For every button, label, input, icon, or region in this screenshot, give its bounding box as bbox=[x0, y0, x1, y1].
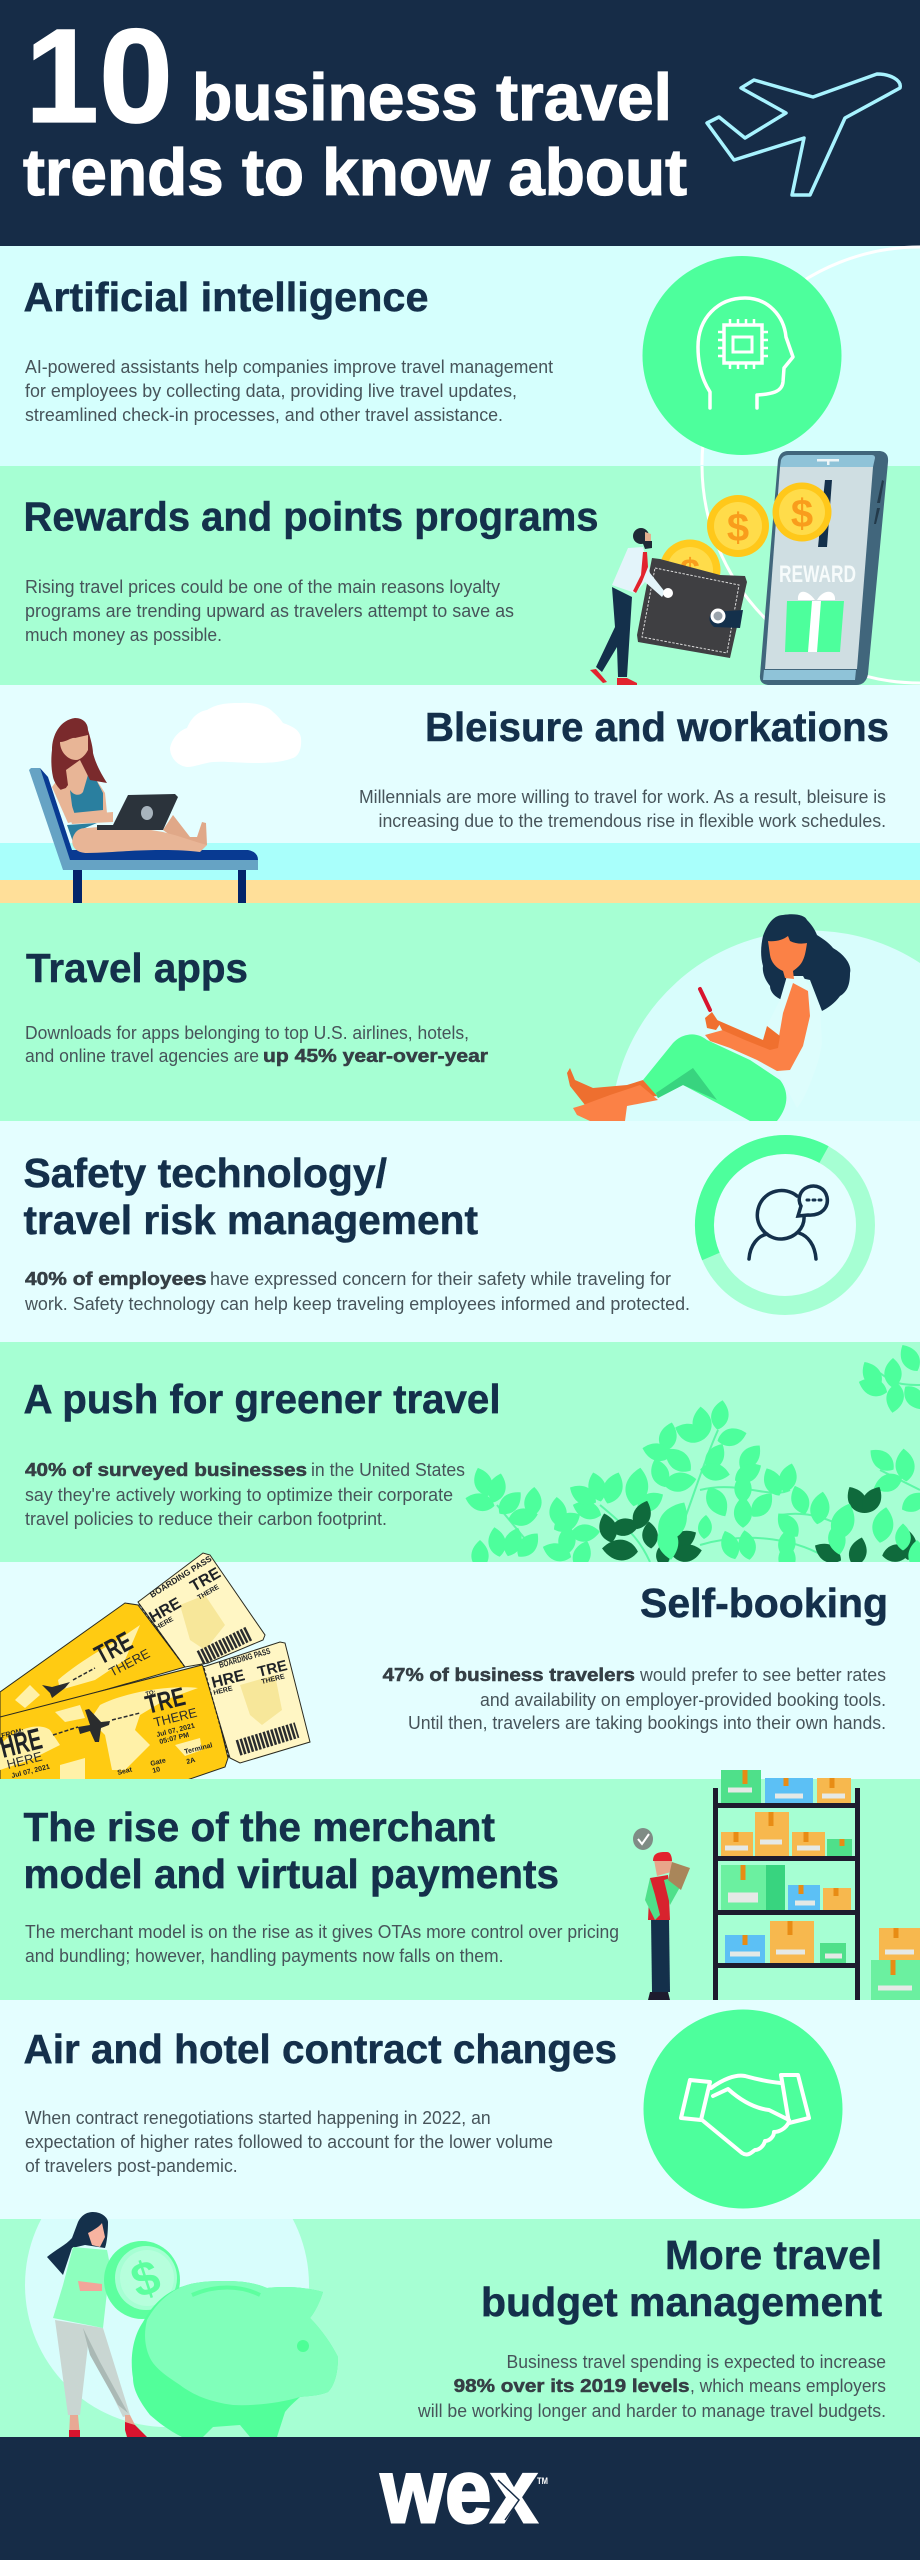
heading: Air and hotel contract changes bbox=[24, 2026, 617, 2072]
text block: will be working longer and harder to manage travel budgets. bbox=[417, 2401, 886, 2421]
panel: travel budget management bbox=[0, 2212, 920, 2437]
panel: footer bbox=[0, 2437, 920, 2560]
text block: would prefer to see better rates bbox=[639, 1665, 886, 1685]
front ticket: Seat bbox=[117, 1766, 133, 1777]
text block: When contract renegotiations started happening in 2022, an bbox=[25, 2108, 491, 2128]
front ticket: FROM: bbox=[1, 1728, 25, 1740]
front ticket: 05:07 PM bbox=[159, 1732, 190, 1746]
illustration: phone with reward: $ bbox=[791, 492, 813, 536]
decorative arc bbox=[702, 247, 920, 465]
heading: budget management bbox=[481, 2279, 882, 2325]
text block: and bundling; however, handling payments now falls on them. bbox=[25, 1946, 504, 1966]
back ticket: HRE bbox=[146, 1595, 185, 1626]
text block: 40% of employees bbox=[25, 1269, 206, 1289]
heading: More travel bbox=[665, 2232, 882, 2278]
text block: have expressed concern for their safety while traveling for bbox=[210, 1269, 671, 1289]
text block: travel policies to reduce their carbon footprint. bbox=[25, 1509, 387, 1529]
back ticket: TRE bbox=[90, 1626, 137, 1670]
heading: Rewards and points programs bbox=[24, 494, 598, 540]
panel: travel apps bbox=[0, 903, 920, 1121]
text block bbox=[417, 2352, 886, 2421]
front ticket: 2A bbox=[186, 1757, 196, 1766]
text block bbox=[359, 787, 886, 831]
heading: Bleisure and workations bbox=[425, 704, 889, 750]
back ticket: THERE bbox=[196, 1584, 221, 1602]
text block bbox=[383, 1665, 886, 1733]
heading: Travel apps bbox=[26, 945, 248, 991]
text block: 40% of surveyed businesses bbox=[25, 1460, 307, 1480]
front ticket: HRE bbox=[210, 1667, 247, 1692]
illustration: warehouse shelf bbox=[713, 1770, 920, 2000]
front ticket: Jul 07, 2021 bbox=[11, 1764, 51, 1780]
heading bbox=[24, 1150, 478, 1243]
front ticket: Terminal bbox=[184, 1742, 213, 1756]
front ticket: TRE bbox=[142, 1681, 188, 1720]
illustration: coin: $ bbox=[125, 2250, 167, 2309]
heading: travel risk management bbox=[24, 1197, 478, 1243]
front ticket: HERE bbox=[213, 1685, 234, 1697]
text block: increasing due to the tremendous rise in flexible work schedules. bbox=[378, 811, 886, 831]
heading: A push for greener travel bbox=[24, 1376, 500, 1422]
panel: artificial intelligence bbox=[0, 246, 920, 466]
text block: in the United States bbox=[311, 1460, 465, 1480]
text block: Downloads for apps belonging to top U.S. airlines, hotels, bbox=[25, 1023, 469, 1043]
text block: expectation of higher rates followed to account for the lower volume bbox=[25, 2132, 553, 2152]
title bbox=[23, 2, 687, 209]
illustration: piggy bank bbox=[132, 2281, 338, 2437]
back ticket bbox=[0, 1553, 265, 1720]
front ticket: THERE bbox=[261, 1673, 286, 1686]
text block: of travelers post-pandemic. bbox=[25, 2156, 238, 2176]
icon: AI head in circle bbox=[642, 256, 842, 455]
front ticket: TRE bbox=[256, 1657, 289, 1681]
illustration: warehouse worker bbox=[633, 1828, 690, 2000]
heading: Safety technology/ bbox=[24, 1150, 387, 1196]
logo: WEX: TM bbox=[537, 2476, 548, 2486]
front ticket: TO: bbox=[145, 1690, 156, 1698]
illustration: woman with phone bbox=[567, 914, 850, 1121]
front ticket: Jul 07, 2021 bbox=[156, 1723, 196, 1739]
panel: self-booking bbox=[0, 1553, 920, 1790]
text block bbox=[25, 2108, 553, 2176]
text block: and availability on employer-provided booking tools. bbox=[480, 1690, 886, 1710]
text block: up 45% year-over-year bbox=[263, 1046, 488, 1066]
text block: 98% over its 2019 levels bbox=[454, 2376, 690, 2396]
text block: streamlined check-in processes, and other travel assistance. bbox=[25, 405, 503, 425]
text block: and online travel agencies are bbox=[25, 1046, 259, 1066]
icon: person with speech bubble bbox=[749, 1186, 827, 1259]
back ticket: TRE bbox=[188, 1565, 224, 1595]
text block bbox=[25, 1460, 465, 1529]
illustration: woman on beach chair with laptop bbox=[29, 718, 258, 903]
illustration: phone with reward: REWARD bbox=[779, 561, 856, 588]
front ticket bbox=[0, 1642, 310, 1790]
heading: Self-booking bbox=[640, 1580, 888, 1626]
text block bbox=[25, 1023, 488, 1066]
illustration: wallet with man bbox=[590, 528, 747, 685]
text block: work. Safety technology can help keep traveling employees informed and protected. bbox=[24, 1294, 690, 1314]
logo: WEX: wex bbox=[380, 2442, 537, 2542]
text block: say they're actively working to optimize their corporate bbox=[25, 1485, 453, 1505]
text block: Rising travel prices could be one of the main reasons loyalty bbox=[25, 577, 500, 597]
heading bbox=[24, 1804, 559, 1897]
front ticket: 10 bbox=[152, 1766, 161, 1775]
illustration: coin bbox=[104, 2241, 180, 2319]
heading: Artificial intelligence bbox=[24, 274, 428, 320]
panel: rewards and points bbox=[0, 451, 920, 685]
title: 10 bbox=[25, 2, 173, 151]
panel: header bbox=[0, 0, 920, 246]
heading: model and virtual payments bbox=[24, 1851, 559, 1897]
illustration: wallet with man: $ bbox=[680, 551, 700, 592]
panel: air and hotel contract changes bbox=[0, 2000, 920, 2219]
illustration: phone with reward: $ bbox=[727, 506, 749, 550]
front ticket: Gate bbox=[150, 1757, 167, 1768]
title: business travel bbox=[192, 60, 672, 134]
text block: , which means employers bbox=[690, 2376, 886, 2396]
front ticket: THERE bbox=[152, 1705, 199, 1730]
illustration: leaves bbox=[463, 1341, 920, 1573]
illustration: boarding passes bbox=[0, 1553, 310, 1790]
text block bbox=[25, 357, 553, 425]
icon: airplane bbox=[707, 74, 900, 195]
text block bbox=[25, 577, 514, 645]
illustration: phone with reward bbox=[707, 451, 888, 685]
chart: 40 percent donut bbox=[704, 1144, 866, 1306]
text block: The merchant model is on the rise as it gives OTAs more control over pricing bbox=[25, 1922, 619, 1942]
background circle bbox=[25, 2219, 309, 2427]
sea band bbox=[0, 843, 920, 880]
panel: merchant model bbox=[0, 1770, 920, 2000]
text block: Millennials are more willing to travel for work. As a result, bleisure is bbox=[359, 787, 886, 807]
text block: Business travel spending is expected to increase bbox=[506, 2352, 886, 2372]
text block: programs are trending upward as travelers attempt to save as bbox=[25, 601, 514, 621]
text block bbox=[24, 1269, 690, 1314]
back ticket: THERE bbox=[106, 1646, 153, 1680]
text block bbox=[25, 1922, 619, 1966]
panel: safety technology bbox=[0, 1121, 920, 1342]
title: trends to know about bbox=[23, 135, 687, 209]
text block: Until then, travelers are taking bookings into their own hands. bbox=[408, 1713, 886, 1733]
text block: much money as possible. bbox=[25, 625, 222, 645]
front ticket: BOARDING PASS bbox=[218, 1646, 272, 1670]
heading bbox=[481, 2232, 882, 2325]
heading: The rise of the merchant bbox=[24, 1804, 495, 1850]
sand band bbox=[0, 880, 920, 903]
decorative arc bbox=[702, 466, 920, 683]
panel: bleisure and workations bbox=[0, 685, 920, 903]
back ticket: HERE bbox=[154, 1616, 175, 1632]
illustration: woman with coin bbox=[47, 2212, 147, 2437]
icon: cloud bbox=[170, 703, 301, 767]
panel: greener travel bbox=[0, 1341, 920, 1573]
icon: handshake in circle bbox=[644, 2010, 842, 2208]
text block: for employees by collecting data, providing live travel updates, bbox=[25, 381, 517, 401]
text block: AI-powered assistants help companies improve travel management bbox=[25, 357, 553, 377]
back ticket: BOARDING PASS bbox=[148, 1553, 214, 1600]
front ticket: HERE bbox=[5, 1749, 44, 1772]
text block: 47% of business travelers bbox=[383, 1665, 635, 1685]
background circle bbox=[611, 931, 920, 1121]
